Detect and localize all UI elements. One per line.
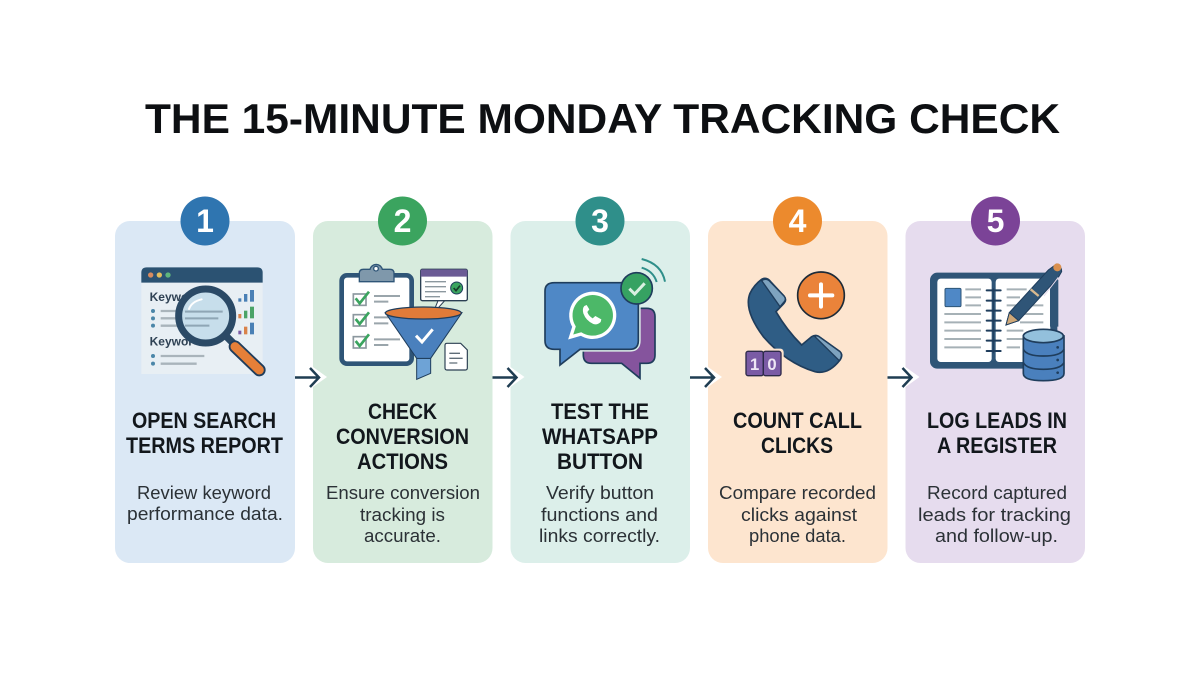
heading 2 xyxy=(336,399,469,474)
panel: step 1 open search terms report xyxy=(115,196,295,563)
description 3: Verify button xyxy=(546,483,654,503)
heading 2: CHECK xyxy=(368,399,437,424)
number badge 3 xyxy=(576,196,624,246)
arrow: step 1 to 2 xyxy=(295,367,327,387)
heading 1: OPEN SEARCH xyxy=(132,408,276,433)
description 2: tracking is xyxy=(360,505,445,525)
description 3: functions and xyxy=(541,505,658,525)
heading 4: COUNT CALL xyxy=(733,408,862,433)
icon: clipboard checklist and funnel xyxy=(342,264,467,379)
number badge 2 xyxy=(378,196,427,246)
arrow: step 4 to 5 xyxy=(888,367,920,387)
number badge 1 xyxy=(180,196,230,246)
number badge 2: 2 xyxy=(394,203,411,239)
heading 2: CONVERSION xyxy=(336,424,469,449)
heading 3: BUTTON xyxy=(557,449,643,474)
description 4: phone data. xyxy=(749,526,846,546)
icon: phone handset, plus and counter: 1 xyxy=(750,355,759,374)
arrow: step 3 to 4 xyxy=(690,367,722,387)
card background 1 xyxy=(115,221,295,563)
panel: step 3 test the whatsapp button xyxy=(510,196,690,563)
number badge 3: 3 xyxy=(591,203,609,239)
icon: keyword report with magnifier xyxy=(141,267,263,374)
number badge 4 xyxy=(773,196,822,246)
description 5: and follow-up. xyxy=(935,526,1058,546)
description 2 xyxy=(326,483,480,546)
number badge 4: 4 xyxy=(789,203,807,239)
icon: phone handset, plus and counter xyxy=(743,272,844,378)
arrow: step 2 to 3 xyxy=(492,367,524,387)
description 3: links correctly. xyxy=(539,526,660,546)
heading 3: WHATSAPP xyxy=(542,424,658,449)
description 3 xyxy=(539,483,660,546)
heading 3: TEST THE xyxy=(551,399,649,424)
description 2: accurate. xyxy=(364,526,441,546)
panel: step 2 check conversion actions xyxy=(313,196,492,563)
heading 5 xyxy=(927,408,1067,458)
card background 4 xyxy=(708,221,888,563)
description 2: Ensure conversion xyxy=(326,483,480,503)
icon: whatsapp chat bubbles xyxy=(545,259,665,378)
description 1: Review keyword xyxy=(137,483,271,503)
heading 5: LOG LEADS IN xyxy=(927,408,1067,433)
number badge 1: 1 xyxy=(196,203,214,239)
heading 1 xyxy=(126,408,283,458)
heading 2: ACTIONS xyxy=(357,449,448,474)
description 5: leads for tracking xyxy=(918,505,1071,525)
description 5 xyxy=(918,483,1071,546)
card background 2 xyxy=(313,221,492,563)
heading 5: A REGISTER xyxy=(937,433,1057,458)
description 1 xyxy=(127,483,283,524)
description 5: Record captured xyxy=(927,483,1067,503)
number badge 5 xyxy=(971,196,1020,246)
card background 3 xyxy=(510,221,690,563)
icon: keyword report with magnifier: Keywor xyxy=(150,335,193,349)
panel: step 4 count call clicks xyxy=(708,196,888,563)
heading 1: TERMS REPORT xyxy=(126,433,283,458)
heading 4 xyxy=(733,408,862,458)
description 4: clicks against xyxy=(741,505,857,525)
icon: keyword report with magnifier: Keywo xyxy=(150,290,188,304)
number badge 5: 5 xyxy=(987,203,1004,239)
heading 4: CLICKS xyxy=(761,433,833,458)
description 4 xyxy=(719,483,876,546)
icon: spiral register, pen and database xyxy=(930,263,1064,381)
card background 5 xyxy=(906,221,1085,563)
description 1: performance data. xyxy=(127,504,283,524)
panel: step 5 log leads in a register xyxy=(906,196,1085,563)
description 4: Compare recorded xyxy=(719,483,876,503)
icon: phone handset, plus and counter: 0 xyxy=(767,355,777,374)
heading 3 xyxy=(542,399,658,474)
title: THE 15-MINUTE MONDAY TRACKING CHECK xyxy=(145,95,1060,142)
